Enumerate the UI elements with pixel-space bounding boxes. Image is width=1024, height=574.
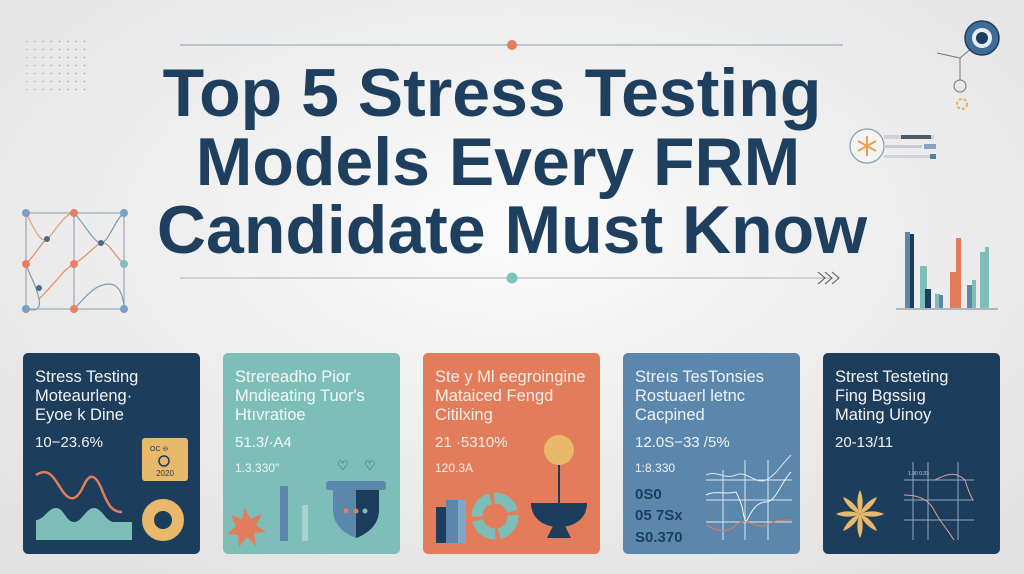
panel 3: 120.3A bbox=[435, 461, 473, 475]
panel 5: 20-13/11 bbox=[835, 434, 893, 451]
panel 5: Mating Uinoy bbox=[835, 406, 932, 424]
panel 3 bbox=[423, 353, 600, 554]
icon: flower bbox=[836, 490, 884, 538]
panel 4: 12.0S−33 /5% bbox=[635, 434, 730, 451]
panel 4: 05 7Sx bbox=[635, 507, 683, 524]
panel 2: Htıvratioe bbox=[235, 406, 306, 424]
bars bbox=[280, 486, 288, 541]
panel 2: Strereadho Pior bbox=[235, 368, 351, 386]
icon: shield: ♡ bbox=[337, 458, 349, 473]
panel 4: 1:8.330 bbox=[635, 461, 675, 475]
icon: network graph bbox=[22, 209, 128, 313]
panel 2: 1.3.330" bbox=[235, 461, 279, 475]
panel 1: Moteaurleng· bbox=[35, 387, 132, 405]
panel 3: Mataiced Fengd bbox=[435, 387, 553, 405]
panel 3: 21 ·5310% bbox=[435, 434, 508, 451]
icon: target node bbox=[937, 21, 999, 109]
line chart bbox=[904, 462, 974, 540]
line chart: 1.90 0.33 bbox=[908, 471, 929, 477]
icon: calendar card: 2020 bbox=[156, 469, 174, 478]
icon: donut bbox=[148, 505, 178, 535]
icon: shield bbox=[326, 458, 386, 538]
icon: shield: ♡ bbox=[364, 458, 376, 473]
title: Candidate Must Know bbox=[157, 192, 868, 268]
chart: wave bbox=[36, 472, 132, 540]
panel 5: Fing Bgssiıg bbox=[835, 387, 926, 405]
icon: calendar card: OC ⊖ bbox=[150, 446, 168, 453]
panel 4 bbox=[623, 353, 800, 554]
icon: bowl lamp bbox=[531, 435, 587, 538]
panel 2: Mndieating Tuor's bbox=[235, 387, 365, 405]
line chart bbox=[706, 455, 792, 540]
panel 4: Rostuaerl letnc bbox=[635, 387, 745, 405]
icon: ring bbox=[477, 498, 513, 534]
panel 5 bbox=[823, 353, 1000, 554]
panel 1: Stress Testing bbox=[35, 368, 138, 386]
panel 1: Eyoe k Dine bbox=[35, 406, 124, 424]
panel 4: 0S0 bbox=[635, 486, 662, 503]
title: Top 5 Stress Testing bbox=[163, 55, 821, 131]
icon: gauge with bars bbox=[850, 129, 936, 163]
decor: dot grid bbox=[26, 39, 86, 97]
panel 5: Strest Testeting bbox=[835, 368, 948, 386]
panel 2 bbox=[223, 353, 400, 554]
title bbox=[157, 55, 868, 268]
bar chart bbox=[896, 232, 998, 309]
title: Models Every FRM bbox=[196, 124, 800, 200]
panel 4: Cacpined bbox=[635, 406, 705, 424]
panel 4: S0.370 bbox=[635, 529, 683, 546]
icon: starburst bbox=[227, 507, 266, 547]
icon: calendar card bbox=[142, 438, 188, 481]
panel 1 bbox=[23, 353, 200, 554]
panel 2: 51.3/·A4 bbox=[235, 434, 292, 451]
bottom divider with arrows bbox=[180, 272, 839, 284]
top divider with dot bbox=[180, 40, 843, 50]
panel 3: Ste y Ml eegroingine bbox=[435, 368, 585, 386]
icon: blocks bbox=[436, 500, 466, 543]
panel 4: Streıs TesTonsies bbox=[635, 368, 764, 386]
panel 1: 10−23.6% bbox=[35, 434, 103, 451]
panel 3: Citilxing bbox=[435, 406, 493, 424]
